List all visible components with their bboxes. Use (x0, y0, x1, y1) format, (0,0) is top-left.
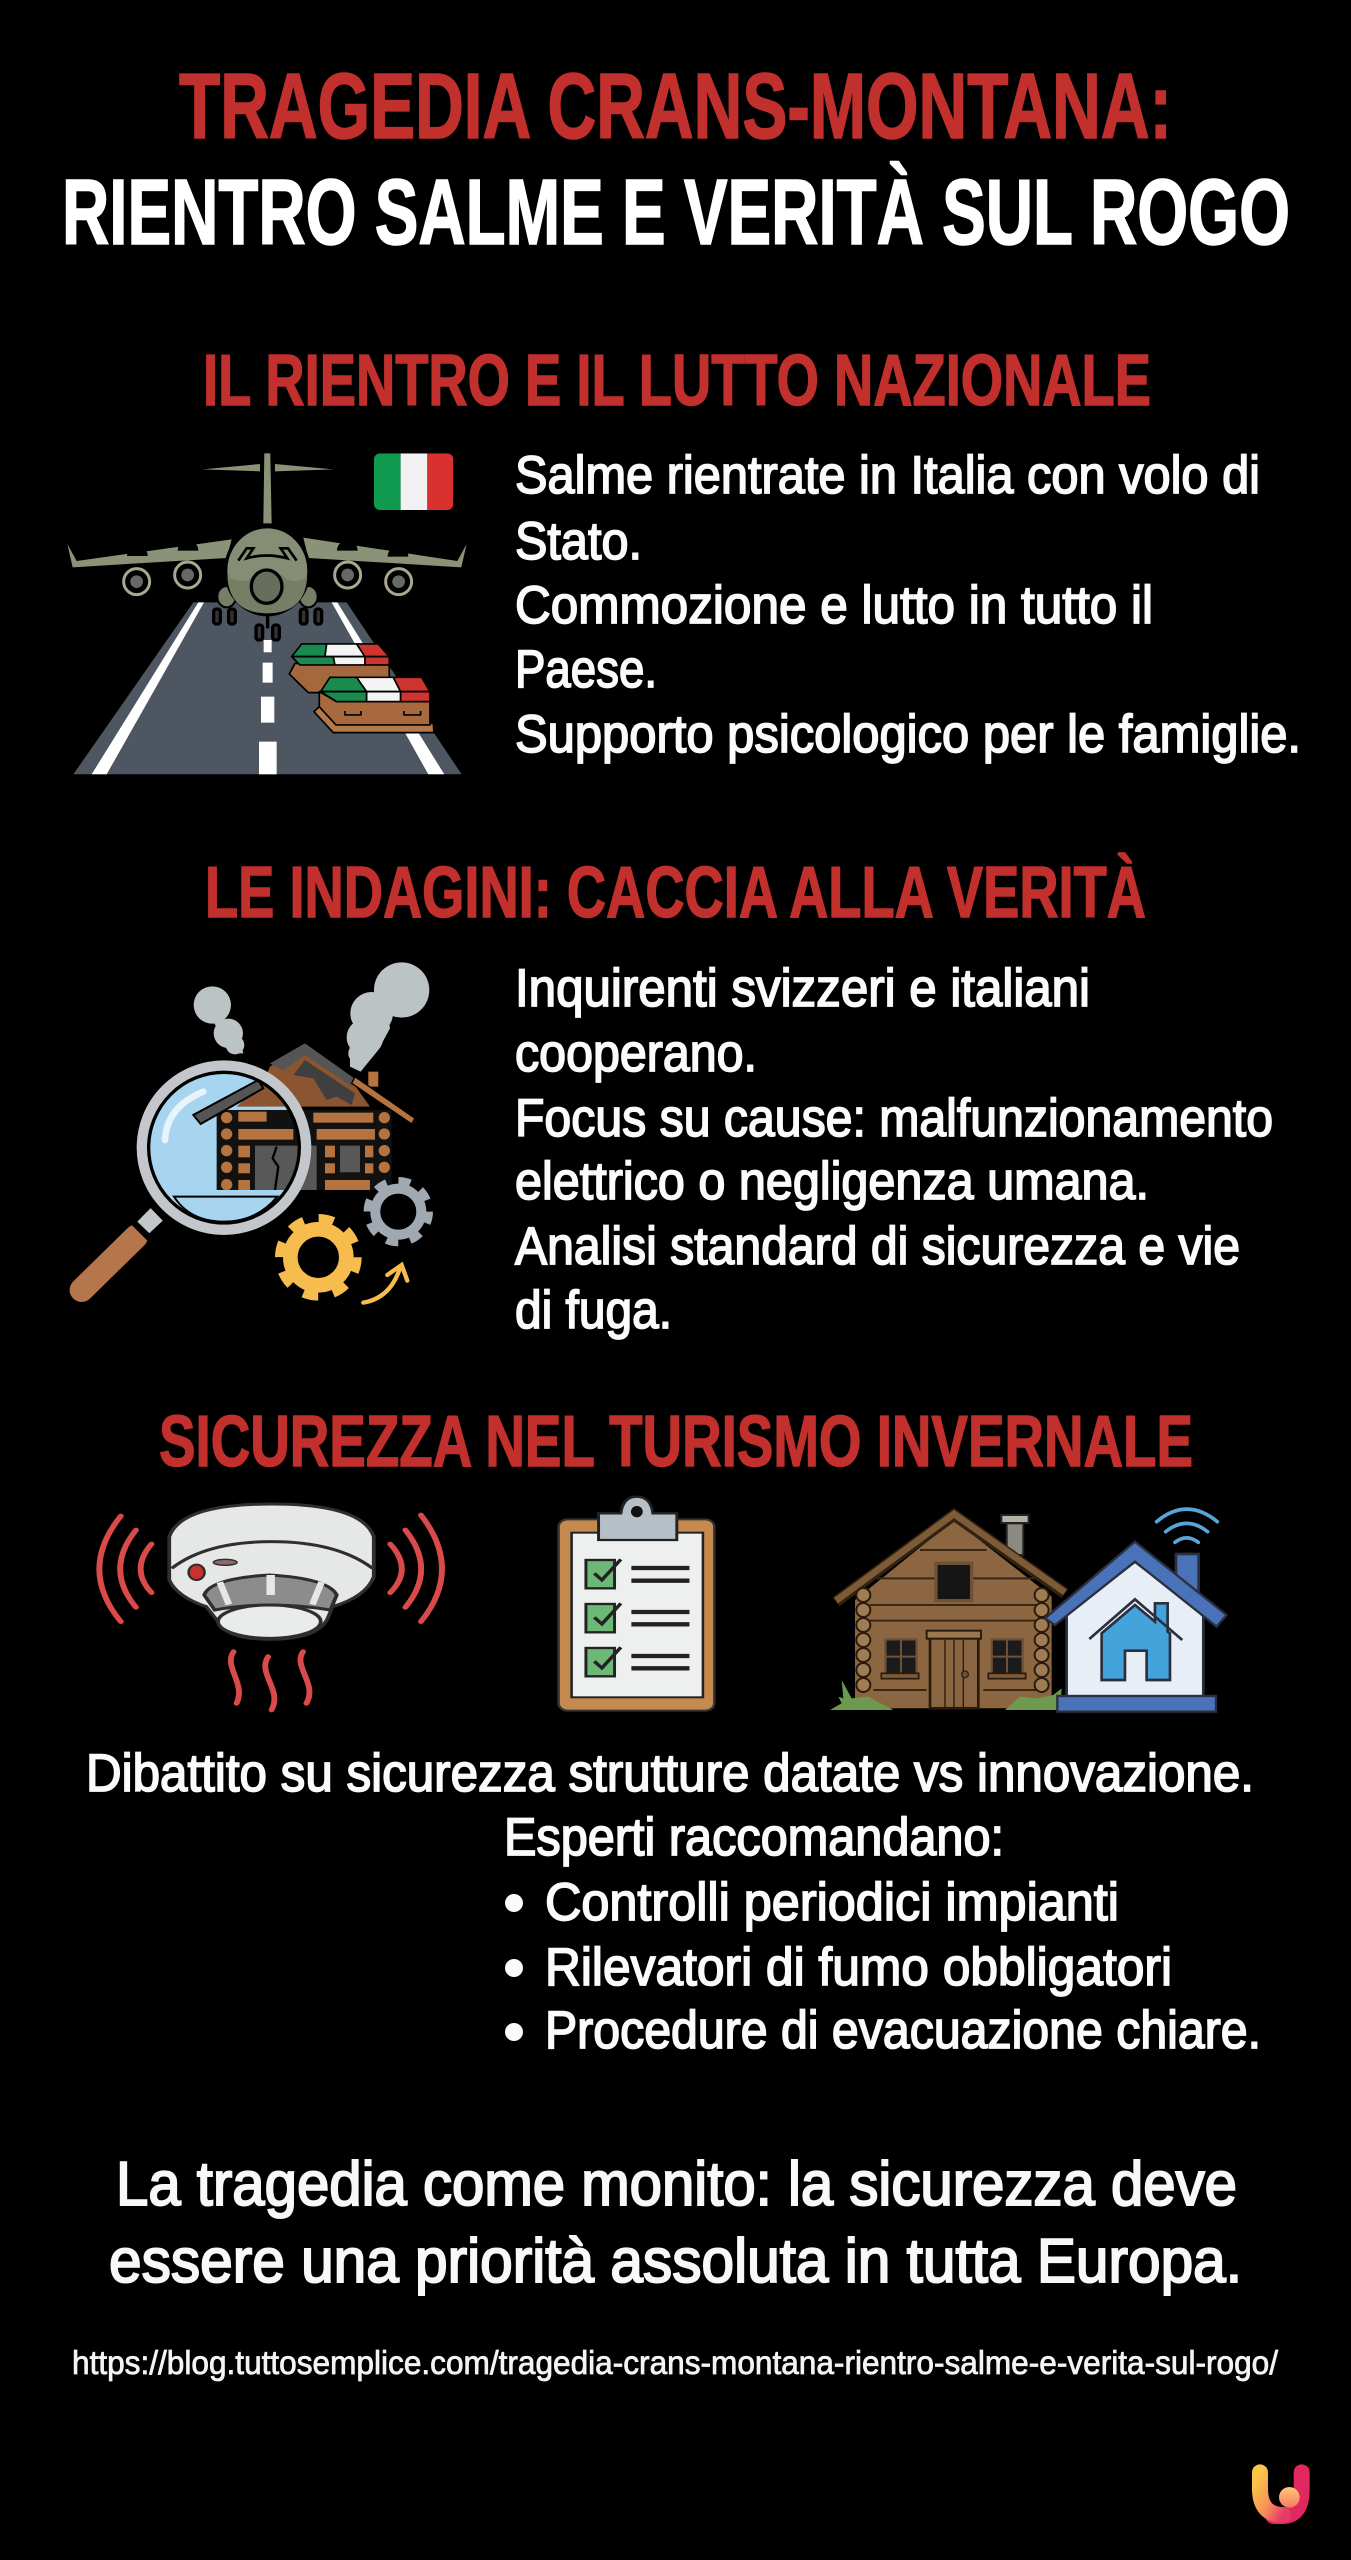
text block: rientro: Stato. (515, 512, 642, 571)
panel: sicurezza nel turismo invernale (86, 1402, 1261, 2060)
text block: rientro: Supporto psicologico per le famiglie. (515, 705, 1301, 764)
text block: esperti raccomandano: Esperti raccomandano: (504, 1808, 1004, 1867)
icon: plane on runway with coffins (67, 453, 467, 774)
source url: https://blog.tuttosemplice.com/tragedia-crans-montana-rientro-salme-e-verita-sul-rogo/ (72, 2344, 1279, 2381)
closing statement (109, 2150, 1242, 2296)
title (62, 54, 1290, 264)
text block: indagini: di fuga. (515, 1281, 672, 1340)
text block: indagini: Inquirenti svizzeri e italiani (515, 959, 1090, 1018)
text block: rientro: Commozione e lutto in tutto il (515, 576, 1153, 635)
closing statement: essere una priorità assoluta in tutta Europa. (109, 2227, 1242, 2296)
text block: indagini: cooperano. (515, 1024, 757, 1083)
icon: yellow gear (279, 1218, 357, 1296)
text block: esperti raccomandano: Controlli periodici impianti (545, 1873, 1119, 1932)
text block: indagini: elettrico o negligenza umana. (515, 1152, 1149, 1211)
text block: dibattito: Dibattito su sicurezza strutture datate vs innovazione. (86, 1744, 1254, 1803)
icon: grey gear (367, 1181, 429, 1243)
icon: smoke detector (99, 1504, 442, 1710)
icon: rear coffin (289, 644, 389, 693)
panel: le indagini (82, 853, 1273, 1340)
icon: yellow arrow (363, 1265, 407, 1303)
icon: checklist clipboard (559, 1497, 714, 1711)
icon: logo (1260, 2472, 1302, 2516)
text block: esperti raccomandano: Procedure di evacuazione chiare. (545, 2001, 1261, 2060)
text block: rientro: Salme rientrate in Italia con volo di (515, 446, 1260, 505)
text block: rientro (515, 446, 1301, 764)
text block: indagini: Focus su cause: malfunzionamento (515, 1089, 1273, 1148)
text block: esperti raccomandano (504, 1808, 1261, 2060)
panel: il rientro e il lutto nazionale (67, 341, 1301, 774)
icon: italian flag (374, 453, 453, 510)
text block: rientro: Paese. (515, 640, 657, 699)
text block: indagini: Analisi standard di sicurezza e vie (515, 1217, 1240, 1276)
icon: log cabin and smart house (830, 1509, 1227, 1712)
icon: magnifier on burnt cabin with gears (82, 962, 429, 1303)
text block: indagini (515, 959, 1273, 1340)
icon: front coffin (314, 677, 434, 733)
text block: esperti raccomandano: Rilevatori di fumo obbligatori (545, 1938, 1172, 1997)
closing statement: La tragedia come monito: la sicurezza deve (116, 2150, 1237, 2219)
